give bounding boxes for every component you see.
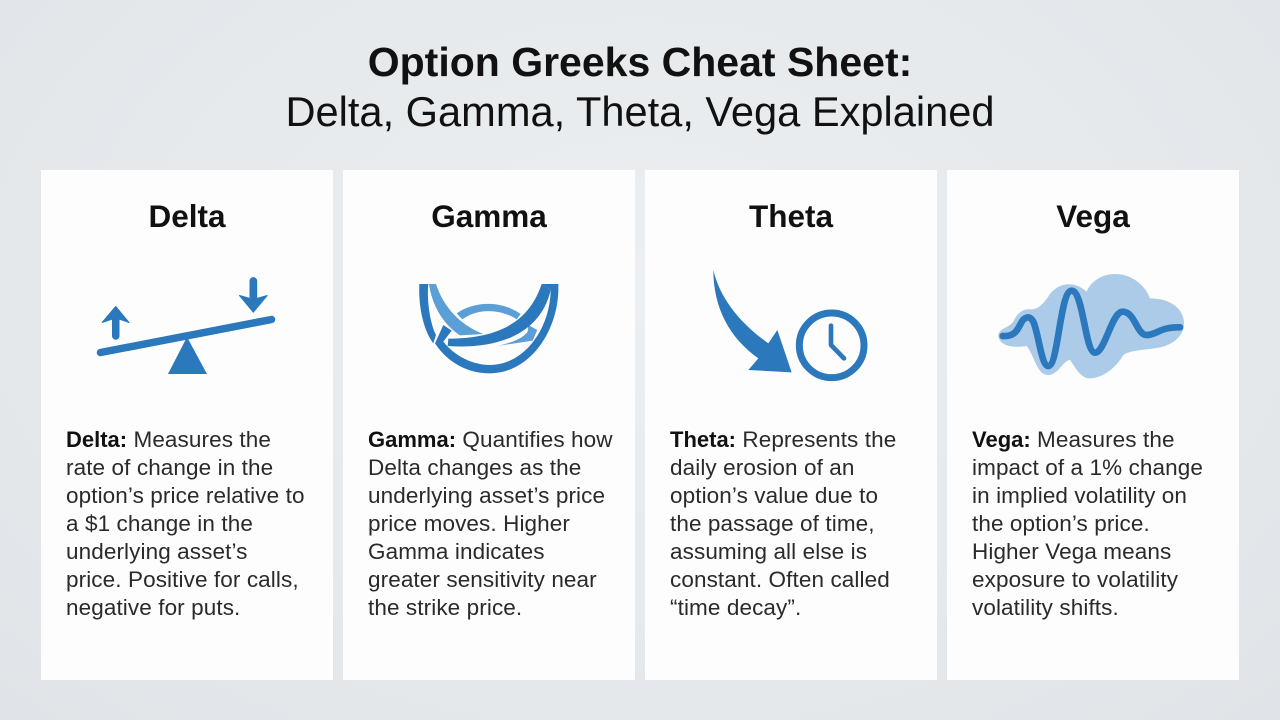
panel: Theta [645, 170, 937, 680]
icon: down arrow and clock [713, 270, 868, 382]
panel: Delta [41, 170, 333, 680]
text: Vega description: Vega: Measures the [972, 427, 1175, 452]
text: Gamma description: Delta changes as the [368, 455, 581, 480]
text: Theta description: assuming all else is [670, 539, 867, 564]
text: Vega description: impact of a 1% change [972, 455, 1203, 480]
heading: Delta: Delta [148, 198, 226, 234]
text: Delta description: price. Positive for calls, [66, 567, 299, 592]
title: Delta, Gamma, Theta, Vega Explained [285, 88, 995, 135]
title [285, 39, 995, 135]
text: Delta description: Delta: Measures the [66, 427, 271, 452]
text: Theta description: daily erosion of an [670, 455, 855, 480]
text: Gamma description: Gamma indicates [368, 539, 545, 564]
text: Delta description: rate of change in the [66, 455, 273, 480]
icon: wave on cloud [998, 274, 1184, 378]
text: Vega description: the option’s price. [972, 511, 1150, 536]
heading: Theta: Theta [749, 198, 833, 234]
text: Vega description [972, 427, 1203, 620]
text: Vega description: volatility shifts. [972, 595, 1119, 620]
text: Gamma description: the strike price. [368, 595, 522, 620]
text: Theta description: the passage of time, [670, 511, 875, 536]
text: Delta description: a $1 change in the [66, 511, 253, 536]
text: Gamma description: underlying asset’s price [368, 483, 605, 508]
text: Delta description: negative for puts. [66, 595, 240, 620]
text: Theta description: Theta: Represents the [670, 427, 896, 452]
text: Gamma description [368, 427, 613, 620]
text: Delta description: option’s price relative to [66, 483, 305, 508]
text: Gamma description: Gamma: Quantifies how [368, 427, 613, 452]
heading: Vega: Vega [1056, 198, 1130, 234]
text: Gamma description: greater sensitivity near [368, 567, 597, 592]
text: Gamma description: price moves. Higher [368, 511, 570, 536]
panel: Gamma [343, 170, 635, 680]
panel: Vega [947, 170, 1239, 680]
text: Vega description: Higher Vega means [972, 539, 1171, 564]
text: Vega description: in implied volatility on [972, 483, 1187, 508]
text: Vega description: exposure to volatility [972, 567, 1178, 592]
heading: Gamma: Gamma [431, 198, 547, 234]
text: Theta description [670, 427, 896, 620]
text: Delta description: underlying asset’s [66, 539, 248, 564]
text: Theta description: option’s value due to [670, 483, 878, 508]
text: Delta description [66, 427, 305, 620]
text: Theta description: constant. Often called [670, 567, 890, 592]
icon: seesaw with arrows [96, 277, 276, 374]
title: Option Greeks Cheat Sheet: [368, 39, 912, 85]
icon: gamma curves [419, 284, 558, 374]
text: Theta description: “time decay”. [670, 595, 801, 620]
